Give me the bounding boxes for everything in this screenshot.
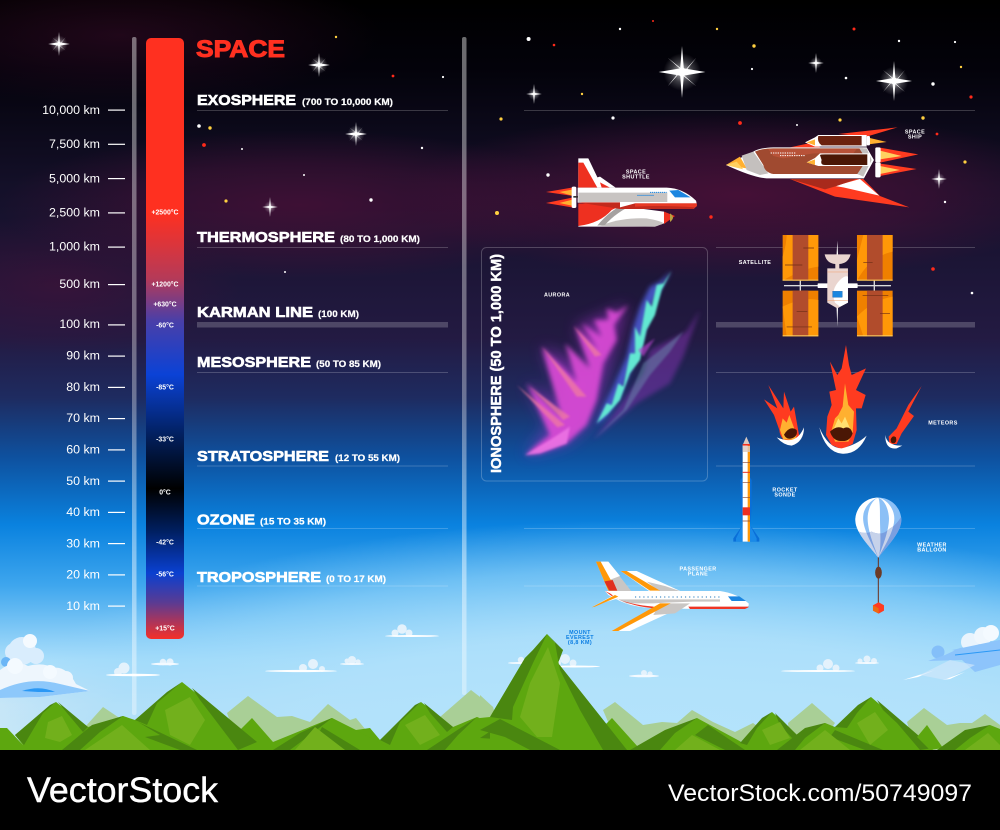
label: ozone — [197, 512, 326, 528]
label: troposphere: TROPOSPHERE — [197, 570, 321, 586]
label: mesosphere — [197, 355, 381, 371]
panel: ionosphere — [482, 248, 708, 481]
label: ozone: OZONE — [197, 512, 255, 528]
icon: weather balloon — [855, 498, 901, 614]
mountains — [0, 634, 1000, 750]
label: weather balloon — [917, 542, 947, 554]
label: thermosphere: (80 TO 1,000 KM) — [340, 234, 420, 244]
heading: space: SPACE — [196, 36, 285, 63]
temperature bar: -56°C — [156, 570, 174, 578]
label: space ship — [905, 130, 925, 140]
temperature bar: +15°C — [155, 624, 175, 632]
altitude scale: 70 km — [66, 411, 100, 425]
label: troposphere — [197, 570, 386, 586]
label: exosphere: (700 TO 10,000 KM) — [302, 97, 393, 107]
clouds — [0, 624, 1000, 698]
label: mount everest — [566, 630, 594, 646]
altitude scale: 500 km — [59, 277, 100, 291]
label: karman line: (100 KM) — [318, 309, 359, 319]
cloud: right large — [903, 625, 1000, 680]
temperature bar: -33°C — [156, 436, 174, 444]
label: passenger plane: PLANE — [688, 572, 708, 578]
altitude scale: 10 km — [66, 599, 100, 613]
label: ozone: (15 TO 35 KM) — [260, 516, 326, 526]
altitude scale: 7,500 km — [49, 137, 100, 151]
label: mesosphere: MESOSPHERE — [197, 355, 311, 371]
label: space shuttle: SHUTTLE — [622, 174, 650, 180]
label: thermosphere: THERMOSPHERE — [197, 230, 335, 246]
label: meteors: METEORS — [928, 420, 958, 426]
left range — [0, 682, 560, 750]
label: weather balloon: WEATHER — [917, 542, 947, 548]
temperature bar: -42°C — [156, 538, 174, 546]
altitude scale: 40 km — [66, 505, 100, 519]
temperature bar: -60°C — [156, 322, 174, 330]
small stars — [197, 20, 973, 294]
label: space shuttle — [622, 170, 650, 180]
altitude scale: 20 km — [66, 568, 100, 582]
temperature bar — [146, 38, 184, 639]
label: rocket sonde — [772, 488, 798, 498]
label: troposphere: (0 TO 17 KM) — [326, 574, 386, 584]
label: stratosphere — [197, 449, 400, 465]
temperature bar: +630°C — [153, 300, 177, 308]
bright stars — [48, 32, 947, 217]
label: weather balloon: BALLOON — [917, 548, 947, 554]
label: rocket sonde: ROCKET — [772, 488, 798, 494]
footer brand: VectorStock — [27, 771, 219, 810]
label: stratosphere: (12 TO 55 KM) — [335, 453, 400, 463]
label: karman line: KARMAN LINE — [197, 305, 313, 321]
altitude scale: 10,000 km — [42, 103, 100, 117]
label: stratosphere: STRATOSPHERE — [197, 449, 329, 465]
label: karman line — [197, 305, 359, 321]
label: space shuttle: SPACE — [626, 170, 646, 176]
icon: rocket sonde — [733, 437, 759, 542]
altitude axis dividers — [132, 37, 466, 715]
altitude scale: 2,500 km — [49, 206, 100, 220]
label: mount everest: (8,8 KM) — [568, 640, 592, 646]
icon: space ship — [726, 127, 918, 207]
aurora — [517, 271, 700, 455]
label: thermosphere — [197, 230, 420, 246]
label: exosphere — [197, 93, 393, 109]
altitude scale — [42, 103, 125, 613]
icon: space shuttle — [546, 158, 697, 227]
altitude scale: 60 km — [66, 442, 100, 456]
label: satellite: SATELLITE — [739, 260, 771, 266]
label: aurora: AURORA — [544, 292, 570, 298]
label: mesosphere: (50 TO 85 KM) — [316, 359, 381, 369]
layer lines — [197, 110, 975, 586]
icon: satellite — [783, 235, 893, 336]
label: mount everest: MOUNT — [569, 630, 591, 636]
label: space ship: SPACE — [905, 130, 925, 136]
small clouds — [106, 624, 879, 677]
icon: meteors — [764, 345, 922, 454]
icon: mount everest — [480, 634, 627, 750]
temperature bar: +1200°C — [151, 280, 179, 288]
label: exosphere: EXOSPHERE — [197, 93, 296, 109]
temperature bar: -85°C — [156, 384, 174, 392]
label: passenger plane — [679, 566, 717, 578]
altitude scale: 1,000 km — [49, 240, 100, 254]
cloud: left large — [0, 634, 90, 698]
label: rocket sonde: SONDE — [774, 492, 796, 498]
altitude scale: 90 km — [66, 348, 100, 362]
label: mount everest: EVEREST — [566, 635, 594, 641]
altitude scale: 50 km — [66, 474, 100, 488]
altitude scale: 5,000 km — [49, 172, 100, 186]
temperature bar: 0°C — [159, 488, 171, 496]
right range — [480, 697, 1000, 750]
icon: passenger plane — [592, 562, 749, 631]
label: passenger plane: PASSENGER — [679, 566, 717, 572]
temperature bar: +2500°C — [151, 208, 179, 216]
label: space ship: SHIP — [908, 134, 922, 140]
altitude scale: 30 km — [66, 536, 100, 550]
vertical title: IONOSPHERE (50 TO 1,000 KM) — [488, 254, 505, 473]
footer url: VectorStock.com/50749097 — [668, 780, 972, 807]
back mountains — [85, 690, 1000, 750]
footer bar — [0, 750, 1000, 830]
altitude scale: 80 km — [66, 380, 100, 394]
altitude scale: 100 km — [59, 317, 100, 331]
